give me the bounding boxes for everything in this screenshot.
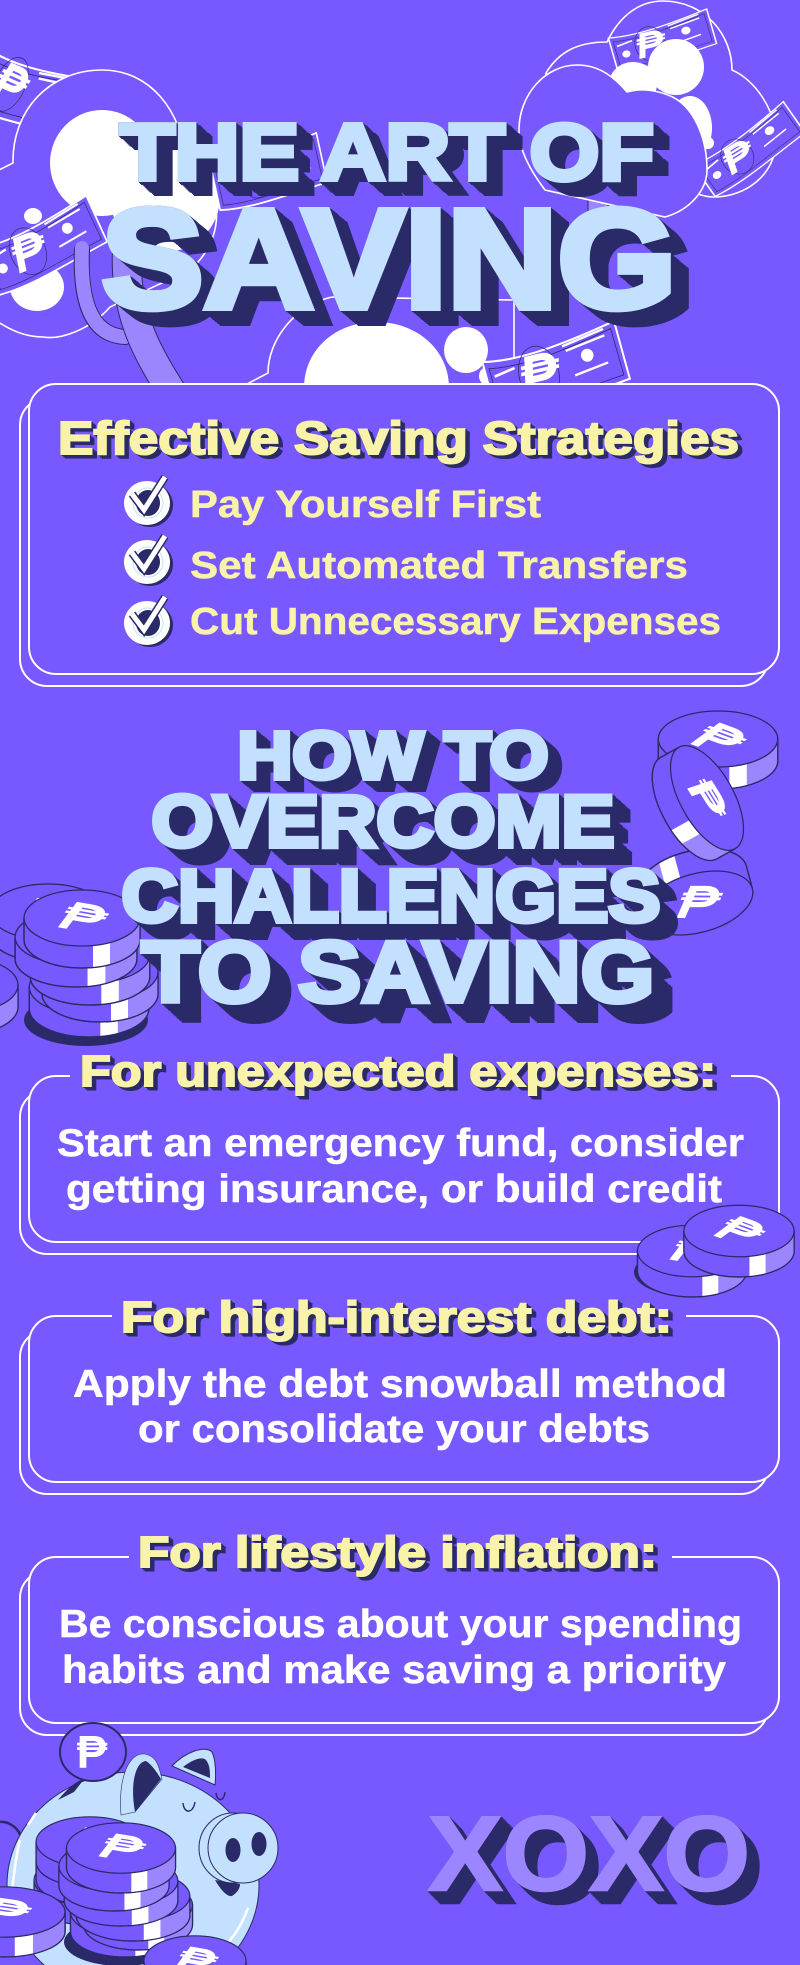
coin shadow bbox=[634, 1248, 742, 1296]
panel back outline bbox=[20, 1330, 768, 1494]
pig highlights bbox=[12, 1813, 248, 1955]
coin: top: ₱ bbox=[682, 713, 759, 766]
illustration: money tree centre bbox=[208, 133, 633, 422]
item text 2: Set Automated Transfers bbox=[190, 545, 688, 587]
heading: Effective Saving Strategies bbox=[58, 412, 739, 464]
title: the art of saving bbox=[102, 108, 676, 338]
white foliage blobs right bbox=[609, 39, 714, 160]
coin: back stack bbox=[34, 1855, 142, 1925]
bill: right bbox=[690, 101, 800, 198]
coin: bottom front bbox=[144, 1936, 246, 1965]
coin: lower tilted: ₱ bbox=[674, 877, 726, 929]
heading: For high-interest debt: bbox=[121, 1293, 672, 1342]
coin: back stack mid bbox=[36, 1835, 144, 1905]
panel: for high-interest debt bbox=[20, 1293, 779, 1494]
body text bbox=[73, 1363, 727, 1451]
gap in outline bbox=[129, 1551, 672, 1563]
coin: back stack top: ₱ bbox=[63, 1819, 122, 1865]
coins: right of challenges heading bbox=[630, 711, 778, 946]
heading line 1: HOW TO bbox=[238, 718, 548, 794]
cloud: right front canopy bbox=[519, 65, 707, 217]
pig eyes bbox=[183, 1792, 225, 1811]
body text bbox=[59, 1603, 742, 1692]
heading line 4: TO SAVING bbox=[142, 924, 654, 1020]
heading line 3: CHALLENGES bbox=[122, 854, 660, 938]
cloud: bottom centre bbox=[247, 297, 514, 384]
bill: top right bbox=[607, 9, 718, 74]
coin: main stack 2 bbox=[59, 1841, 169, 1911]
coin: back: ₱ bbox=[27, 889, 73, 933]
coin: stack 4 bbox=[42, 944, 158, 1022]
panel back outline bbox=[20, 1090, 768, 1254]
coin: main stack top bbox=[66, 1823, 176, 1893]
coin: right bbox=[684, 1205, 794, 1277]
bill: centre behind title bbox=[208, 133, 329, 212]
panel front outline bbox=[29, 1316, 779, 1482]
coins: left stack bbox=[0, 884, 158, 1046]
bill: bottom centre: ₱ bbox=[513, 338, 569, 412]
bill: right: ₱ bbox=[713, 129, 764, 183]
coin: back stack top bbox=[36, 1817, 144, 1887]
body text bbox=[57, 1122, 744, 1211]
coin: left bbox=[637, 1225, 747, 1297]
coin: stack 2 bbox=[15, 909, 137, 987]
coin: main stack top: ₱ bbox=[94, 1825, 152, 1871]
panel: effective saving strategies bbox=[20, 384, 779, 686]
bill: bottom centre bbox=[480, 321, 633, 422]
coin: right: ₱ bbox=[706, 1206, 776, 1256]
coin: tilted: ₱ bbox=[680, 767, 738, 832]
coin: stack 1 bbox=[24, 890, 140, 968]
coin: back bbox=[0, 884, 106, 962]
panel front outline bbox=[29, 1557, 779, 1723]
pig snout bbox=[199, 1813, 278, 1883]
heading: how to overcome challenges to saving bbox=[122, 718, 660, 1020]
body line 2: getting insurance, or build credit bbox=[66, 1168, 722, 1211]
branch: left hook bbox=[82, 248, 125, 337]
icon: check 1 bbox=[124, 477, 173, 527]
title line 2: SAVING bbox=[102, 180, 676, 338]
item text 3: Cut Unnecessary Expenses bbox=[190, 601, 721, 643]
bill: top right: ₱ bbox=[632, 21, 671, 67]
item text 1: Pay Yourself First bbox=[190, 484, 541, 526]
list item 2 bbox=[124, 536, 688, 587]
trunk: left tree bbox=[127, 250, 172, 392]
coin: left front bbox=[0, 1887, 65, 1957]
white foliage blobs bottom bbox=[304, 322, 495, 388]
coin: stack 5 bbox=[29, 959, 149, 1037]
coin: left: ₱ bbox=[665, 1228, 723, 1274]
coin: stack 1: ₱ bbox=[53, 893, 116, 944]
coin: tilted bbox=[637, 734, 758, 872]
white foliage blobs left bbox=[10, 110, 220, 311]
bill: left bbox=[0, 195, 111, 297]
coins: beside first challenge panel bbox=[634, 1205, 794, 1297]
heading: For lifestyle inflation: bbox=[138, 1528, 657, 1577]
body line 1: Apply the debt snowball method bbox=[73, 1363, 727, 1406]
coin: main stack 3 bbox=[64, 1856, 178, 1926]
panel: for unexpected expenses bbox=[20, 1047, 779, 1254]
trunk: right tree bbox=[588, 190, 608, 290]
coin slot bbox=[58, 1778, 85, 1800]
list item 1 bbox=[124, 477, 541, 527]
pig tail bbox=[0, 1822, 21, 1848]
coin shadow bbox=[64, 1918, 180, 1965]
body line 2: habits and make saving a priority bbox=[62, 1649, 726, 1692]
illustration: money tree right bbox=[519, 1, 800, 290]
panel back outline bbox=[20, 1571, 768, 1735]
body line 1: Start an emergency fund, consider bbox=[57, 1122, 744, 1165]
pig mouth bbox=[215, 1880, 240, 1896]
coin: falling: ₱ bbox=[77, 1726, 108, 1778]
panel front outline bbox=[29, 1076, 779, 1242]
coin: lower tilted bbox=[630, 838, 760, 946]
panel front outline bbox=[29, 384, 779, 674]
panel back outline bbox=[20, 398, 768, 686]
cloud: left tree canopy bbox=[0, 70, 217, 338]
illustration: money tree left bbox=[0, 36, 220, 392]
heading: For unexpected expenses: bbox=[80, 1047, 716, 1096]
body line 1: Be conscious about your spending bbox=[59, 1603, 742, 1646]
pig ear left bbox=[121, 1754, 162, 1815]
bill: left: ₱ bbox=[2, 217, 57, 284]
coin: falling bbox=[60, 1723, 126, 1781]
coin shadow bbox=[24, 994, 148, 1046]
icon: check 3 bbox=[124, 597, 173, 647]
cloud: right back canopy bbox=[546, 1, 776, 197]
pig body bbox=[7, 1772, 259, 1965]
coin: main stack 4 bbox=[76, 1871, 190, 1941]
coin: main stack 5 bbox=[83, 1880, 193, 1950]
illustration: piggy bank with coins bbox=[0, 1723, 278, 1965]
sign-off: xoxo: XOXO bbox=[428, 1795, 750, 1913]
title line 1: THE ART OF bbox=[120, 108, 654, 196]
gap in outline bbox=[70, 1070, 731, 1082]
icon: check 2 bbox=[124, 536, 173, 586]
coin: far left bbox=[0, 957, 18, 1035]
list item 3 bbox=[124, 597, 721, 647]
bill: top left bbox=[0, 36, 85, 145]
body line 2: or consolidate your debts bbox=[138, 1408, 650, 1451]
panel: for lifestyle inflation bbox=[20, 1528, 779, 1735]
pig ear right bbox=[172, 1749, 216, 1785]
coin: stack 3 bbox=[30, 927, 150, 1005]
coin: main stack bottom bbox=[70, 1887, 180, 1957]
heading line 2: OVERCOME bbox=[152, 782, 614, 862]
coin: top bbox=[658, 711, 778, 789]
gap in outline bbox=[112, 1310, 686, 1322]
